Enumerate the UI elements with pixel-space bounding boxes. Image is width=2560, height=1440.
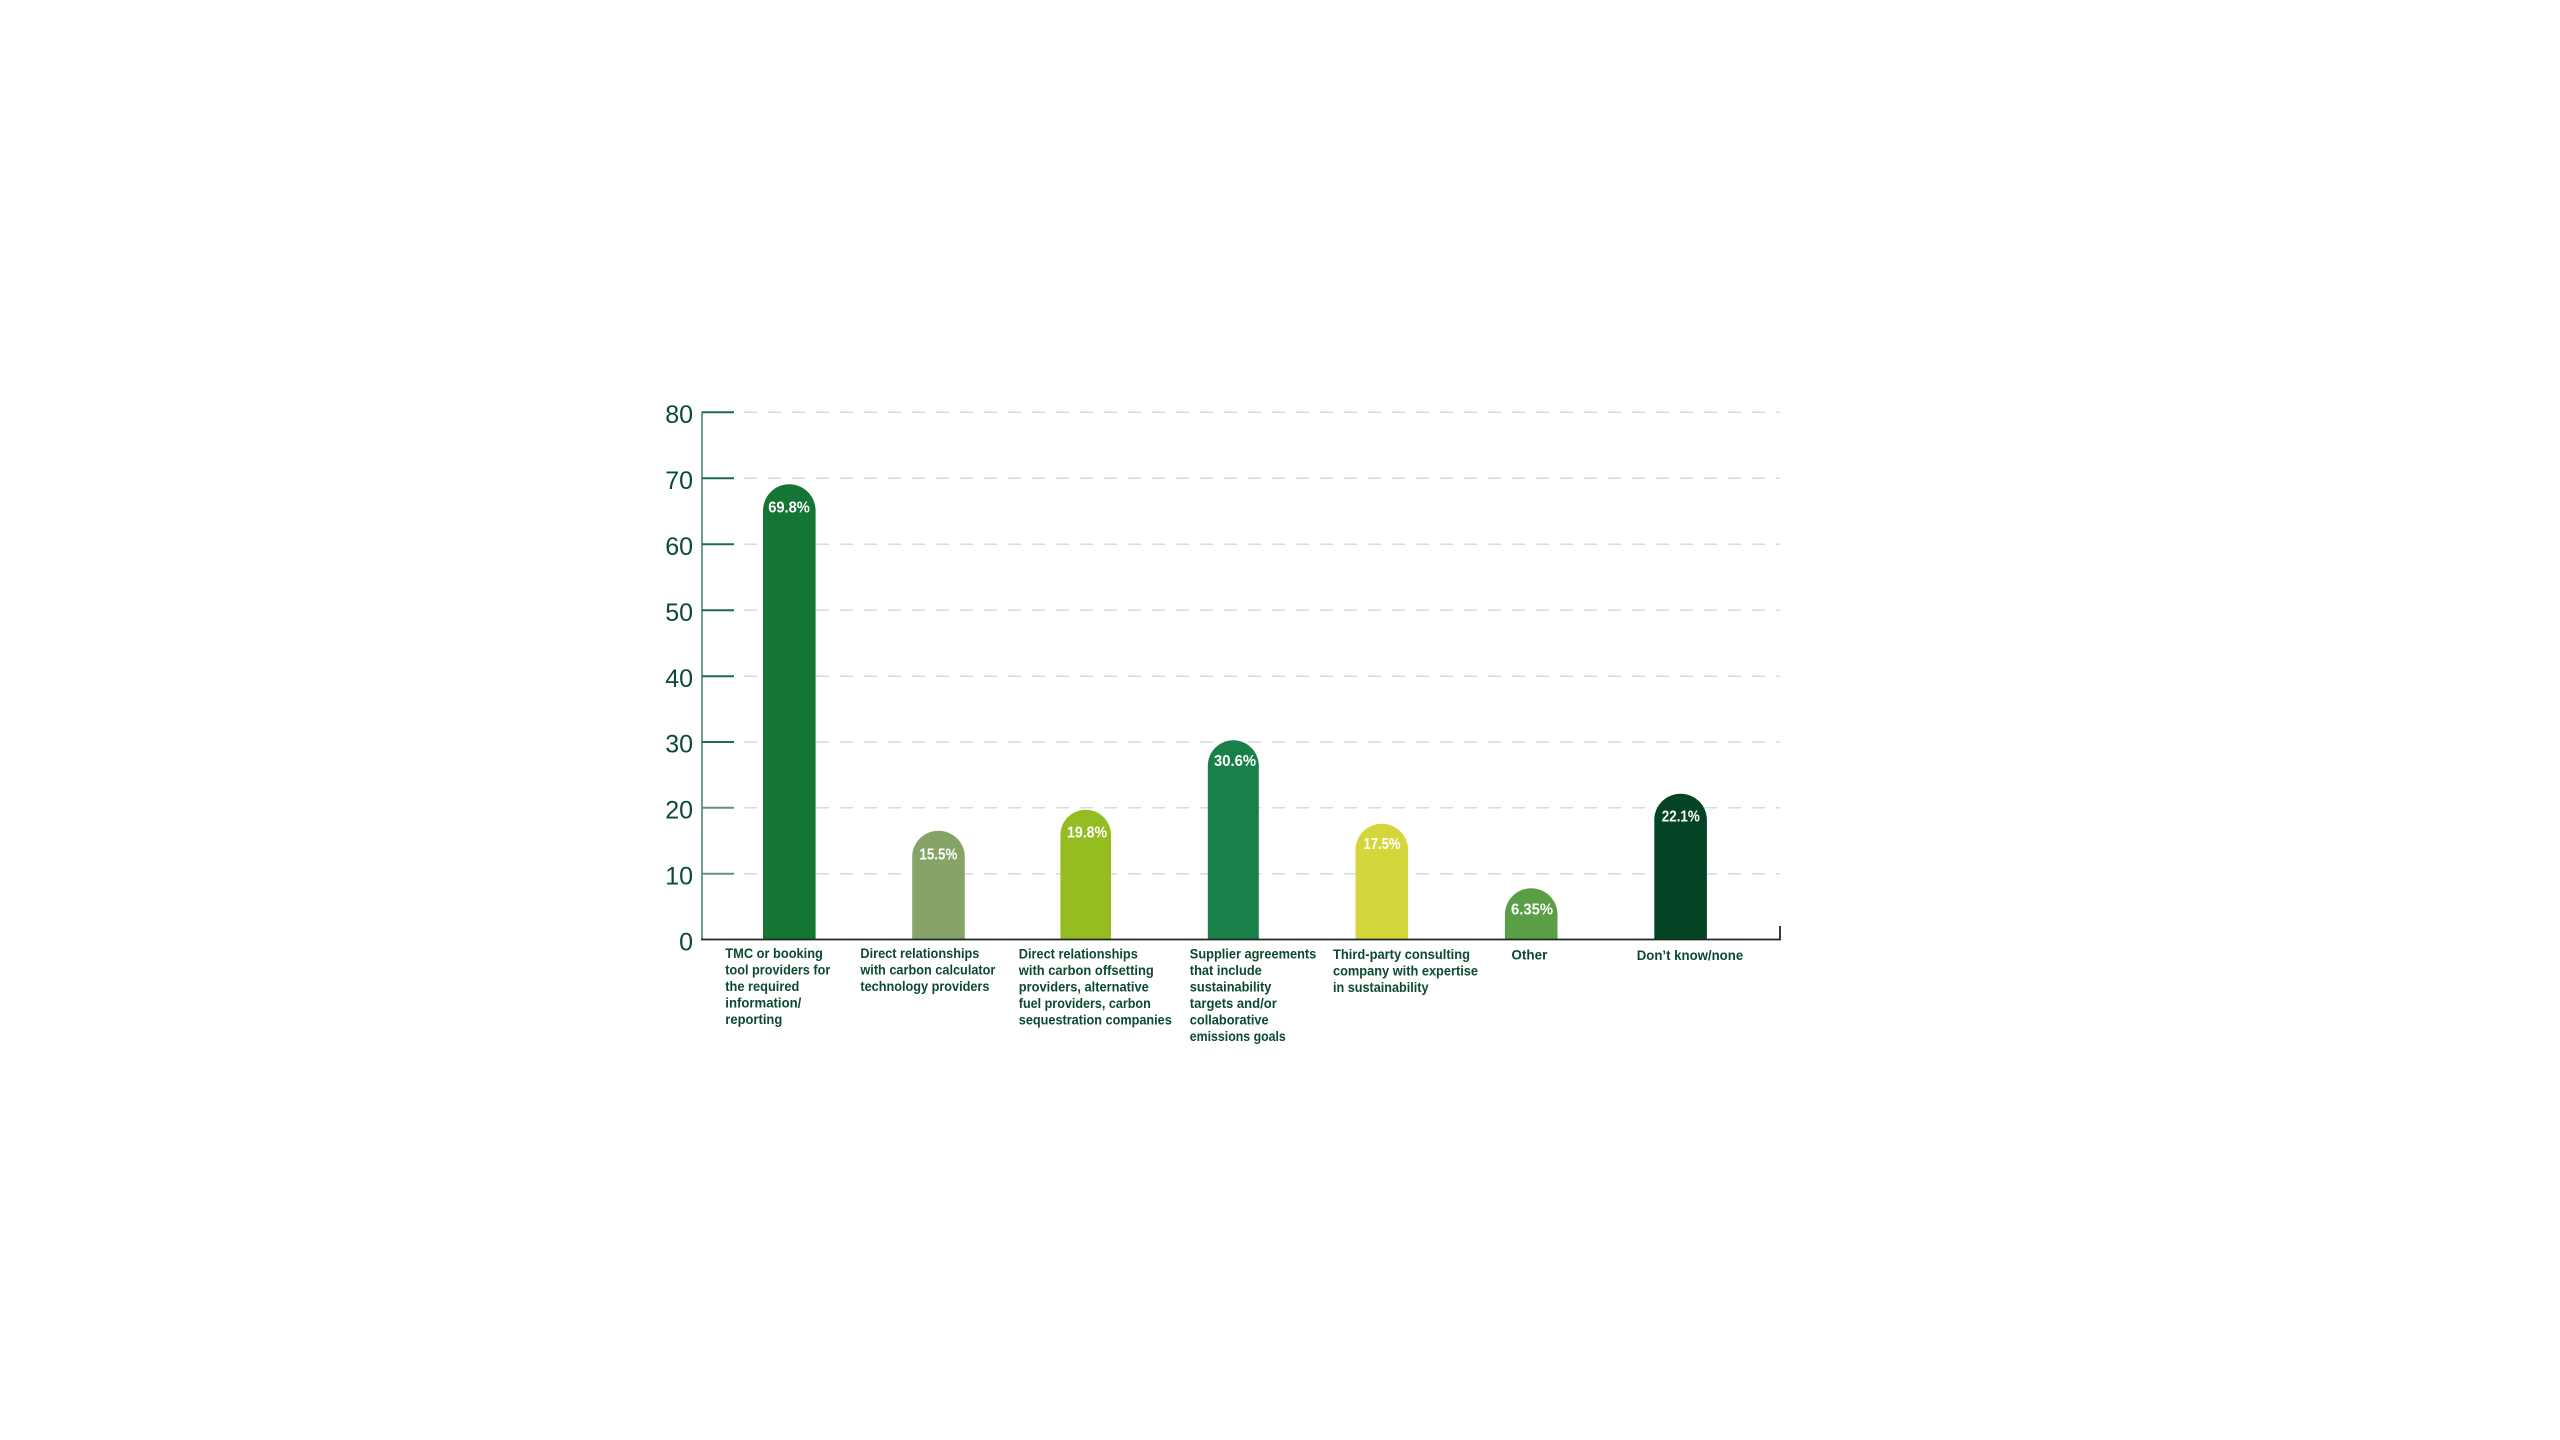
category label: supplier agreements: emissions goals xyxy=(1190,1028,1286,1044)
bar: carbon offsetting providers 19.8% xyxy=(1060,810,1111,940)
y axis labels xyxy=(665,401,693,956)
category label: third-party consulting: in sustainability xyxy=(1333,979,1429,995)
category label: supplier agreements: that include xyxy=(1190,962,1262,978)
bar: supplier agreements 30.6%: 30.6% xyxy=(1214,753,1256,770)
bar: don't know/none 22.1% xyxy=(1654,794,1707,940)
bar: supplier agreements 30.6% xyxy=(1208,740,1259,940)
bar: TMC or booking tool providers 69.8% xyxy=(763,484,816,940)
y axis with ticks xyxy=(702,412,734,940)
category label: carbon offsetting: fuel providers, carbon xyxy=(1019,995,1151,1011)
bar: don't know/none 22.1%: 22.1% xyxy=(1662,808,1700,826)
category label: supplier agreements: collaborative xyxy=(1190,1012,1269,1028)
y axis labels: 80 xyxy=(665,401,693,429)
bar: TMC or booking tool providers 69.8%: 69.8% xyxy=(768,500,810,516)
category label: TMC or booking: the required xyxy=(725,978,799,994)
bar: third-party consulting 17.5% xyxy=(1356,824,1408,940)
y axis labels: 70 xyxy=(665,467,693,495)
category label: third-party consulting: Third-party consulting xyxy=(1333,946,1470,962)
category label: TMC or booking: TMC or booking xyxy=(725,945,823,961)
y axis labels: 20 xyxy=(665,796,693,824)
y axis labels: 30 xyxy=(665,730,693,758)
gridlines xyxy=(744,412,1780,874)
category label: carbon offsetting: with carbon offsetting xyxy=(1018,962,1154,978)
category label: supplier agreements: Supplier agreements xyxy=(1190,946,1316,962)
category label: carbon offsetting: Direct relationships xyxy=(1019,946,1138,962)
category label: don't know/none: Don’t know/none xyxy=(1637,947,1743,963)
category label: other: Other xyxy=(1511,946,1548,962)
category label: carbon calculator: technology providers xyxy=(860,978,990,994)
bar: other 6.35%: 6.35% xyxy=(1511,902,1553,918)
category label: carbon offsetting xyxy=(1018,946,1172,1028)
x axis baseline xyxy=(701,926,1780,940)
y axis labels: 40 xyxy=(665,665,693,693)
category label: supplier agreements xyxy=(1190,946,1316,1044)
y axis labels: 10 xyxy=(665,862,693,890)
category label: TMC or booking xyxy=(725,945,831,1027)
category label: supplier agreements: targets and/or xyxy=(1190,995,1277,1011)
category label: carbon calculator: with carbon calculator xyxy=(859,962,996,978)
category label: TMC or booking: information/ xyxy=(725,994,801,1010)
bar: other 6.35% xyxy=(1505,888,1558,940)
category label: third-party consulting xyxy=(1333,946,1478,995)
category label: third-party consulting: company with expertise xyxy=(1333,962,1478,978)
category label: carbon offsetting: providers, alternative xyxy=(1019,978,1149,994)
bar: carbon offsetting providers 19.8%: 19.8% xyxy=(1067,824,1107,842)
category label: carbon offsetting: sequestration companies xyxy=(1019,1012,1172,1028)
category label: carbon calculator: Direct relationships xyxy=(860,945,980,961)
y axis labels: 0 xyxy=(679,928,693,956)
category label: carbon calculator xyxy=(859,945,996,994)
y axis labels: 50 xyxy=(665,599,693,627)
bar: carbon calculator technology providers 15.5% xyxy=(912,831,965,940)
category label: supplier agreements: sustainability xyxy=(1190,978,1272,994)
y axis labels: 60 xyxy=(665,533,693,561)
bar: carbon calculator technology providers 15.5%: 15.5% xyxy=(919,847,958,864)
bar: third-party consulting 17.5%: 17.5% xyxy=(1364,836,1401,853)
category label: TMC or booking: reporting xyxy=(725,1011,782,1027)
category label: TMC or booking: tool providers for xyxy=(725,962,831,978)
